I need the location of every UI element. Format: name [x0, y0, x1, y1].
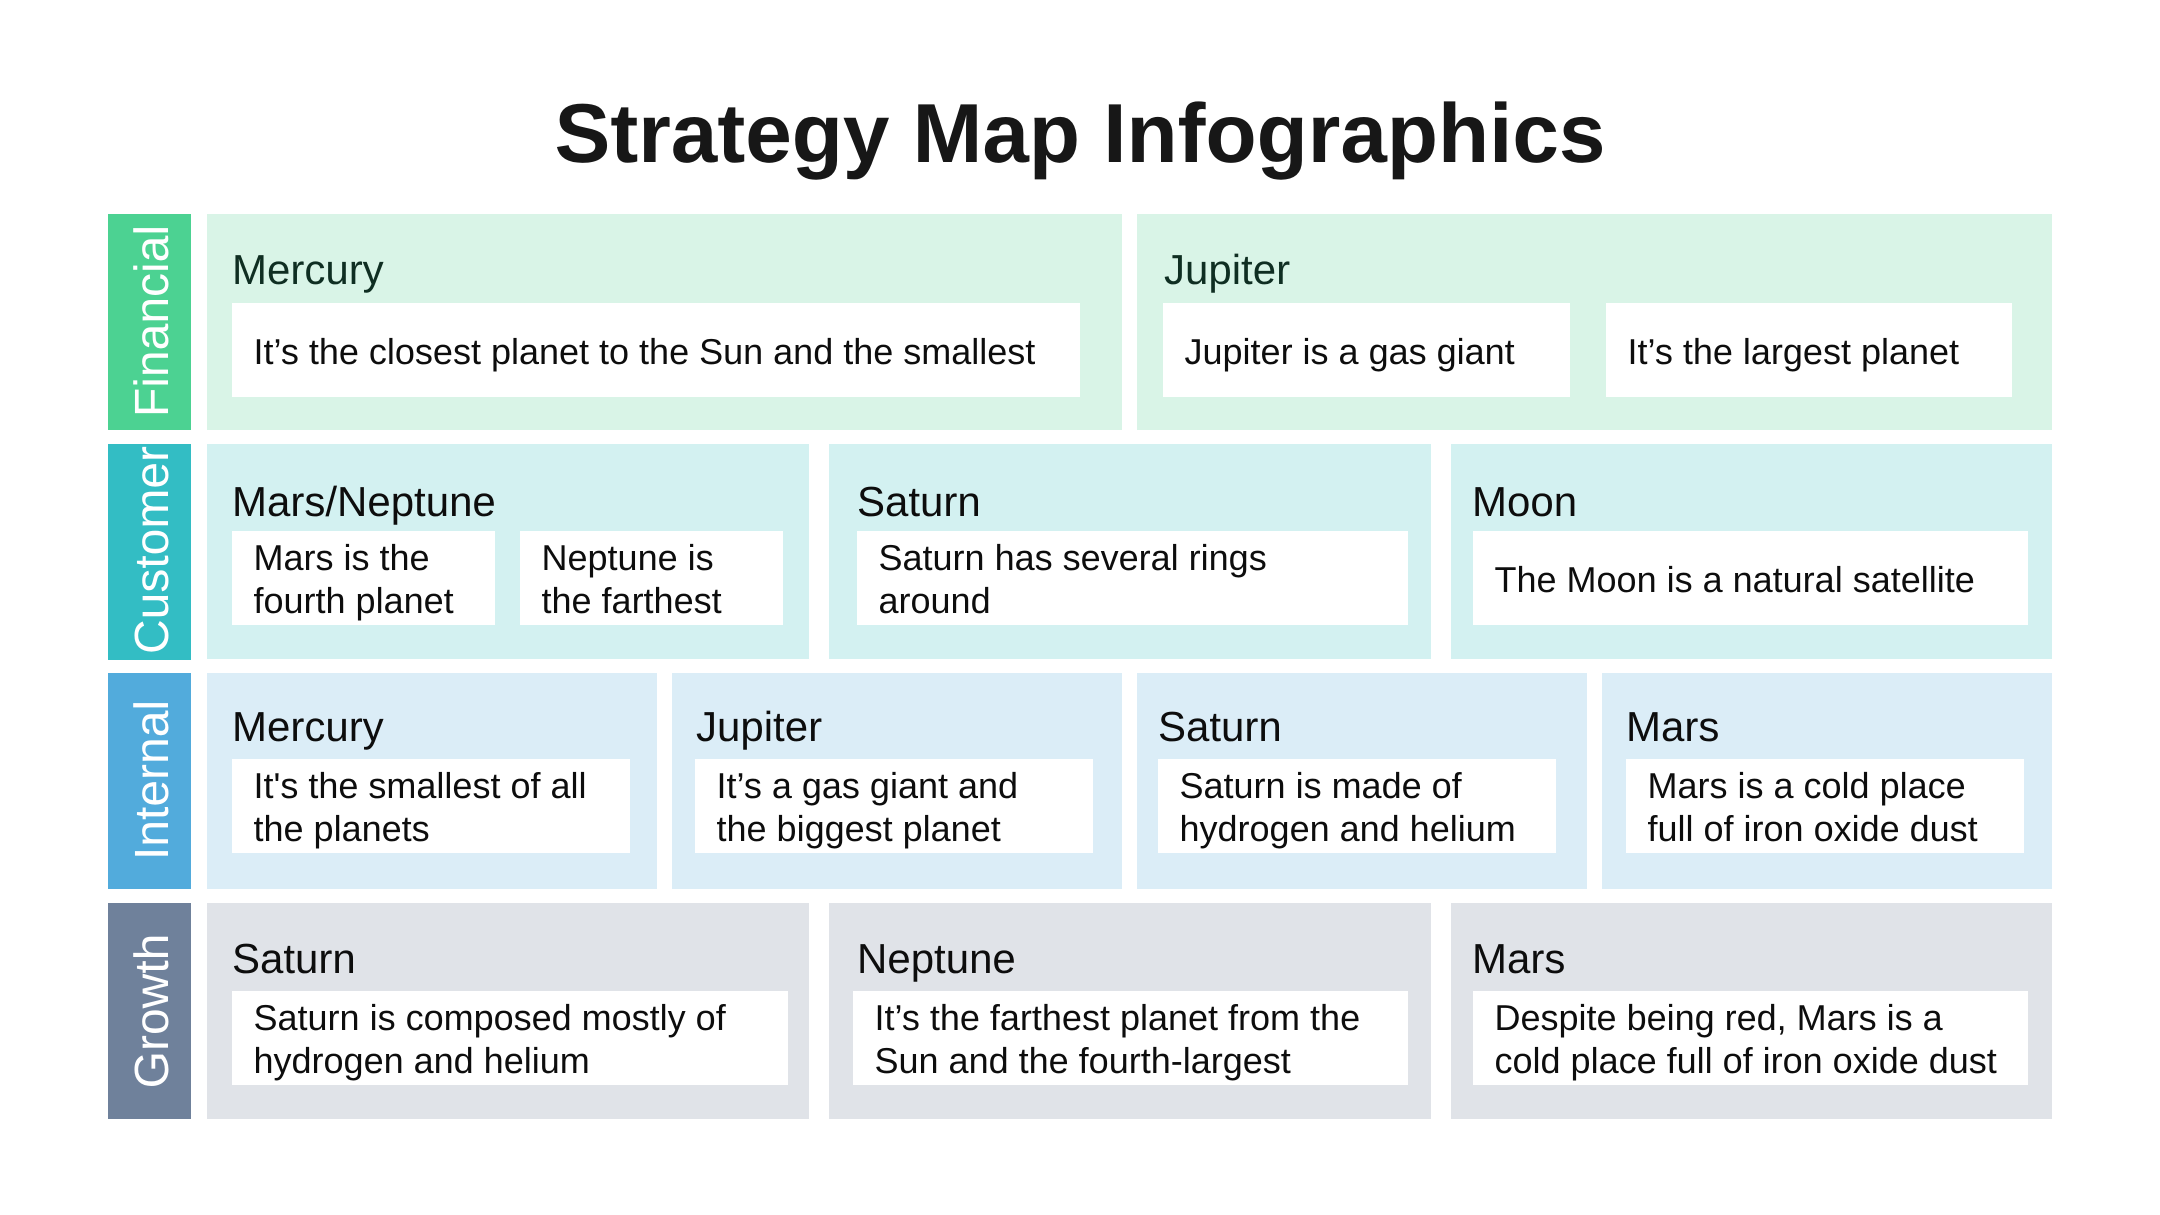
text box [1626, 759, 2024, 853]
heading: Saturn [857, 478, 981, 524]
text box: Mars [232, 531, 495, 625]
heading: Mars/Neptune [232, 478, 496, 524]
text box: cold place full of iron oxide dust [1494, 1040, 1997, 1081]
text box [1158, 759, 1556, 853]
text box [853, 991, 1408, 1085]
text box: largest planet [1606, 303, 2012, 397]
row label: Internal: Internal [126, 700, 179, 860]
row label: Internal [108, 673, 191, 889]
text box: the planets [254, 808, 430, 849]
text box: the biggest planet [716, 808, 1001, 849]
text box: Neptune: the farthest [542, 580, 722, 621]
text box [857, 531, 1408, 625]
heading: Saturn [232, 935, 356, 982]
text box: around [878, 580, 991, 621]
row label: Financial [108, 214, 191, 430]
panel: Growth Saturn [207, 903, 809, 1119]
text box: Sun and the fourth-largest [874, 1040, 1291, 1081]
panel: Customer Moon [1451, 444, 2052, 659]
text box [232, 303, 1080, 397]
heading: Mars [1472, 935, 1565, 982]
text box [695, 759, 1093, 853]
text box: It’s a gas giant and [716, 765, 1018, 806]
heading: Jupiter [1164, 246, 1290, 292]
panel: Internal Saturn [1137, 673, 1587, 889]
panel: Internal Mars [1602, 673, 2052, 889]
panel: Financial Mercury [207, 214, 1122, 430]
panel: Financial Jupiter [1137, 214, 2052, 430]
panel: Growth Neptune [829, 903, 1431, 1119]
text box: full of iron oxide dust [1648, 808, 1978, 849]
text box: Mars: fourth planet [254, 580, 454, 621]
panel: Internal Mercury [207, 673, 657, 889]
text box: Saturn is composed mostly of [254, 997, 726, 1038]
text box: Saturn has several rings [878, 537, 1267, 578]
text box: gas giant: Jupiter is a gas giant [1184, 331, 1515, 372]
text box: largest planet: It’s the largest planet [1628, 331, 1959, 372]
row label: Growth: Growth [126, 934, 179, 1088]
panel: Customer Saturn [829, 444, 1431, 659]
panel: Internal Jupiter [672, 673, 1122, 889]
title: Strategy Map Infographics [555, 86, 1605, 180]
row label: Customer [108, 444, 191, 660]
heading: Saturn [1158, 703, 1282, 750]
text box: The Moon is a natural satellite [1494, 559, 1975, 600]
heading: Mercury [232, 246, 384, 292]
text box [1473, 991, 2028, 1085]
text box: It’s the farthest planet from the [874, 997, 1360, 1038]
row label: Customer: Customer [126, 446, 179, 654]
text box: hydrogen and helium [254, 1040, 590, 1081]
heading: Jupiter [696, 703, 822, 750]
text box: hydrogen and helium [1180, 808, 1516, 849]
text box: It's the smallest of all [254, 765, 586, 806]
text box: Saturn is made of [1180, 765, 1462, 806]
row label: Growth [108, 903, 191, 1119]
row label: Financial: Financial [126, 225, 179, 417]
text box: Neptune: Neptune is [542, 537, 714, 578]
heading: Mercury [232, 703, 384, 750]
panel: Customer Mars/Neptune [207, 444, 809, 659]
text box [232, 759, 630, 853]
heading: Neptune [857, 935, 1016, 982]
text box: Mars: Mars is the [254, 537, 430, 578]
text box: gas giant [1163, 303, 1570, 397]
text box: It’s the closest planet to the Sun and the smallest [254, 331, 1035, 372]
text box: Despite being red, Mars is a [1494, 997, 1943, 1038]
text box [232, 991, 788, 1085]
panel: Growth Mars [1451, 903, 2052, 1119]
text box: Neptune [520, 531, 783, 625]
heading: Mars [1626, 703, 1719, 750]
text box: Mars is a cold place [1648, 765, 1966, 806]
text box [1473, 531, 2028, 625]
heading: Moon [1472, 478, 1577, 524]
